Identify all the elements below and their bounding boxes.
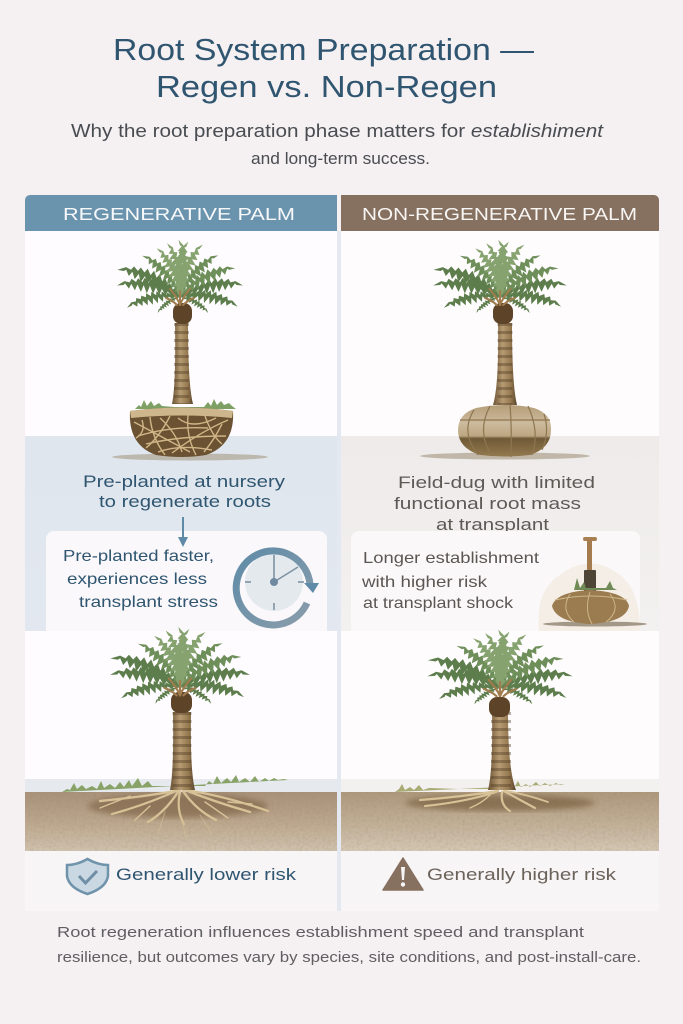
panel: regenerative palm <box>25 195 337 911</box>
illustration: field-dug palm with wrapped root ball <box>420 240 590 460</box>
subtitle: and long-term success. <box>251 149 430 168</box>
card text: experiences less <box>67 571 207 588</box>
header: non-regenerative palm: NON-REGENERATIVE PALM <box>362 204 637 224</box>
footer note <box>57 924 641 966</box>
card text <box>361 550 540 612</box>
icon: shovel in root ball <box>538 537 647 631</box>
title: Root System Preparation — <box>113 32 534 67</box>
outcome: generally higher risk: Generally higher risk <box>427 865 617 884</box>
footer note: resilience, but outcomes vary by species, site conditions, and post-install-care. <box>57 949 641 966</box>
title <box>113 32 534 104</box>
text: pre-planted at nursery: Pre-planted at nursery <box>83 472 286 491</box>
text: field-dug with limited root mass: at transplant <box>436 515 549 534</box>
card text <box>63 548 218 611</box>
divider <box>337 231 341 911</box>
icon: warning triangle <box>383 858 423 890</box>
card text: with higher risk <box>361 574 488 591</box>
subtitle <box>71 121 604 168</box>
soil and limited roots <box>341 712 659 851</box>
header: regenerative palm <box>25 195 337 231</box>
outcome: generally lower risk <box>25 851 337 911</box>
icon: shield with check <box>67 859 108 894</box>
text: pre-planted at nursery: to regenerate roots <box>99 492 271 511</box>
outcome: generally lower risk: Generally lower risk <box>116 865 297 884</box>
card text: transplant stress <box>79 594 218 611</box>
illustration: field-dug palm crown <box>428 630 572 717</box>
icon: clock with arrow <box>236 551 319 625</box>
panel: non-regenerative palm <box>341 195 659 911</box>
footer note: Root regeneration influences establishment speed and transplant <box>57 924 585 941</box>
illustration: established palm crown <box>110 627 250 713</box>
text: field-dug with limited root mass: Field-dug with limited <box>398 473 595 492</box>
card text: Longer establishment <box>363 550 540 567</box>
card: longer establishment <box>351 531 647 631</box>
soil and established roots <box>25 712 337 851</box>
card text: at transplant shock <box>363 595 514 612</box>
illustration: palm with regenerated root ball <box>112 240 268 460</box>
outcome: generally higher risk <box>341 851 659 911</box>
text: field-dug with limited root mass: functional root mass <box>394 494 581 513</box>
header: non-regenerative palm <box>341 195 659 231</box>
text: field-dug with limited root mass <box>394 473 595 534</box>
arrow: nursery to faster <box>178 517 188 547</box>
subtitle: Why the root preparation phase matters for establishiment <box>71 121 604 141</box>
text: pre-planted at nursery <box>83 472 286 511</box>
card: faster establishment <box>46 531 327 631</box>
header: regenerative palm: REGENERATIVE PALM <box>63 204 295 224</box>
title: Regen vs. Non-Regen <box>156 69 497 104</box>
card text: Pre-planted faster, <box>63 548 214 565</box>
